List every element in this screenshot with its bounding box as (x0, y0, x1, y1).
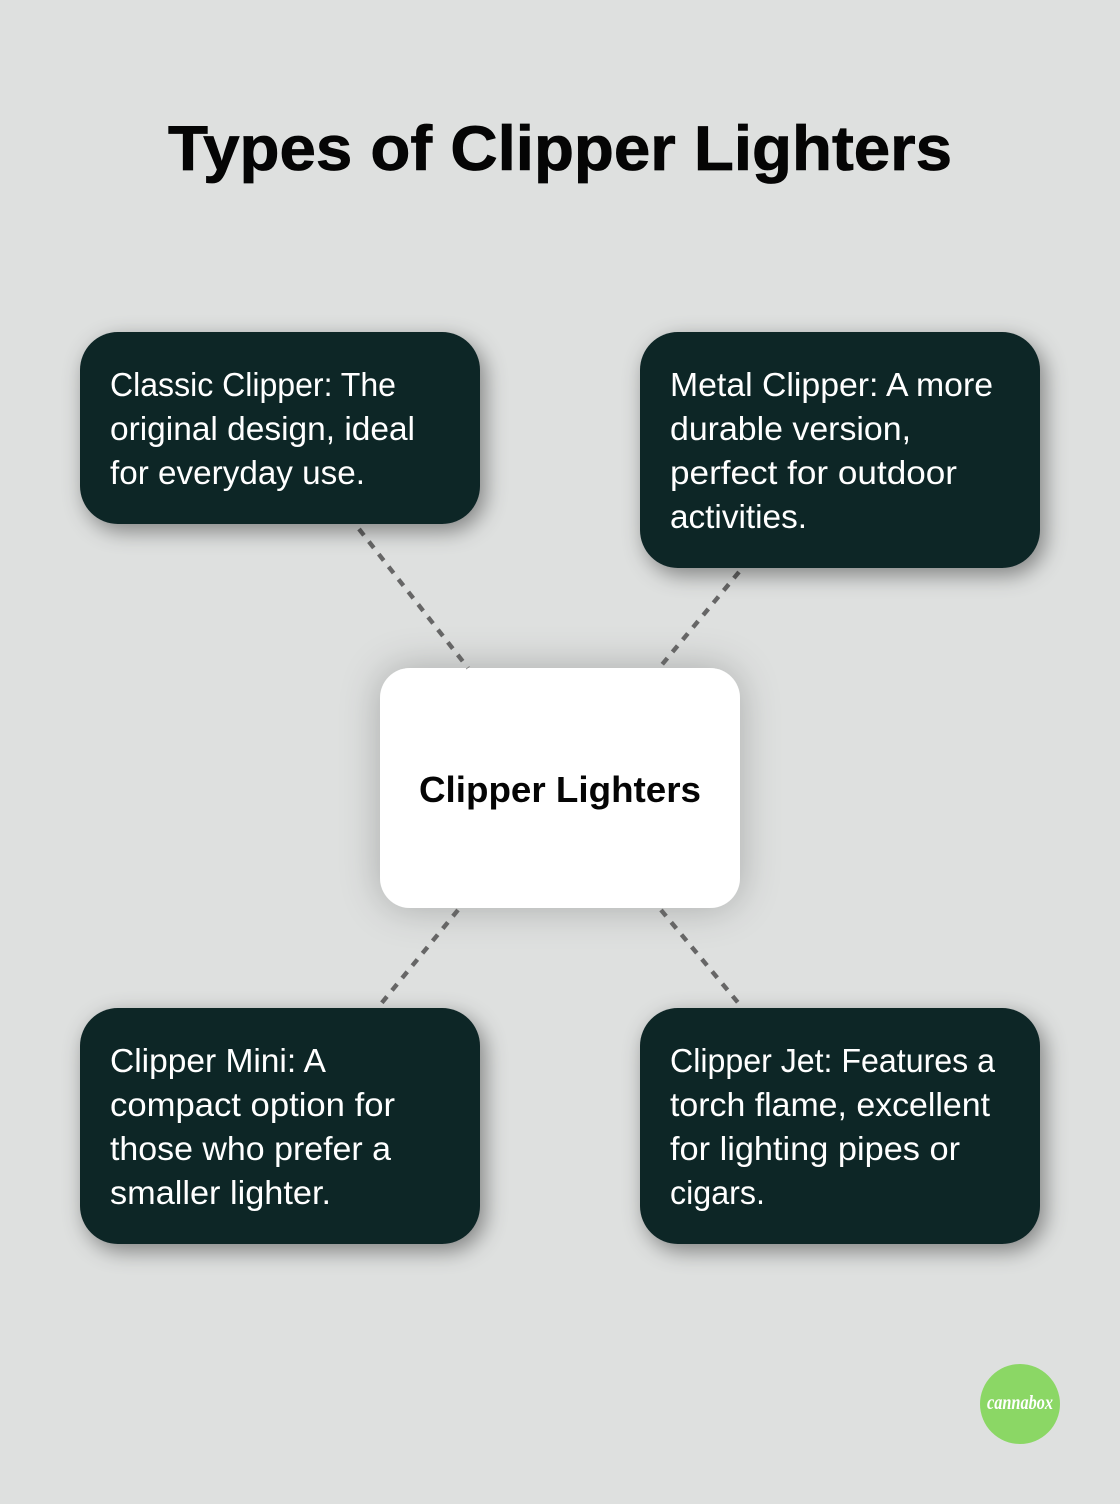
panel: Clipper Jet: torch flame, excellent (670, 1086, 990, 1123)
panel: Clipper Mini: those who prefer a (110, 1130, 392, 1167)
connector: Metal Clipper to center (660, 572, 739, 667)
panel: Classic Clipper (80, 332, 480, 524)
panel: Metal Clipper: Metal Clipper: A more (670, 366, 993, 403)
panel: Clipper Mini: compact option for (110, 1086, 395, 1123)
central node: Clipper Lighters: Clipper Lighters (419, 769, 701, 810)
panel: Clipper Jet: for lighting pipes or (670, 1130, 960, 1167)
panel: Classic Clipper: Classic Clipper: The (110, 366, 396, 403)
central node: Clipper Lighters (380, 668, 740, 908)
panel: Metal Clipper: activities. (670, 498, 807, 535)
panel: Clipper Mini (80, 1008, 480, 1244)
panel: Classic Clipper: original design, ideal (110, 410, 415, 447)
panel: Clipper Mini: smaller lighter. (110, 1174, 331, 1211)
panel: Metal Clipper (640, 332, 1040, 568)
panel: Metal Clipper: perfect for outdoor (670, 454, 957, 491)
logo: cannabox badge (980, 1364, 1060, 1444)
panel: Clipper Mini: Clipper Mini: A (110, 1042, 326, 1079)
connector: Classic Clipper to center (359, 529, 468, 668)
connector: Clipper Mini to center (380, 910, 458, 1005)
panel: Metal Clipper: durable version, (670, 410, 911, 447)
logo: cannabox badge: cannabox (987, 1392, 1053, 1414)
panel: Clipper Jet: Clipper Jet: Features a (670, 1042, 996, 1079)
connector: Clipper Jet to center (661, 910, 740, 1005)
panel: Clipper Jet: cigars. (670, 1174, 765, 1211)
title: Types of Clipper Lighters (168, 114, 952, 184)
panel: Classic Clipper: for everyday use. (110, 454, 365, 491)
panel: Clipper Jet (640, 1008, 1040, 1244)
